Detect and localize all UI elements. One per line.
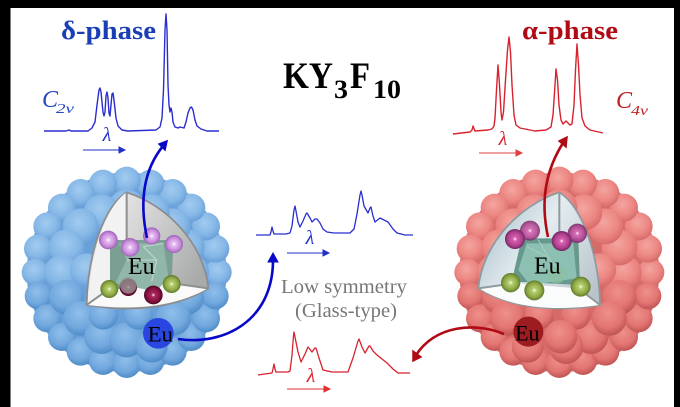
symmetry label: C4v: 4v <box>631 104 649 119</box>
blue spheres <box>22 167 232 378</box>
arrow: blue core to delta spectrum <box>143 141 167 238</box>
symmetry label: C4v <box>616 88 649 119</box>
symmetry label: C2v <box>42 87 75 117</box>
spectrum: low symmetry blue <box>256 191 413 256</box>
spectrum: low symmetry red <box>258 332 410 392</box>
Eu label: Eu <box>534 253 561 279</box>
red spheres <box>454 167 664 378</box>
heading: alpha phase: α-phase <box>522 16 618 45</box>
wavelength arrow <box>479 150 522 156</box>
wavelength symbol: λ <box>498 128 508 150</box>
title: 3 <box>334 75 348 104</box>
nanoparticle: blue delta phase <box>22 167 232 378</box>
title: 10 <box>373 75 401 104</box>
cutaway wedge <box>87 192 208 308</box>
title: F <box>350 56 370 97</box>
wavelength symbol: λ <box>306 365 316 387</box>
arrow: red core to alpha spectrum <box>544 137 567 237</box>
highlighted Eu site: Eu <box>148 322 173 347</box>
spectrum: alpha phase <box>453 37 603 156</box>
nanoparticle: red alpha phase <box>454 167 664 378</box>
coordination polyhedron <box>110 240 173 292</box>
title <box>283 56 401 104</box>
spectrum: delta phase <box>44 14 219 153</box>
title: KY <box>283 56 333 97</box>
text: low symmetry <box>281 276 407 322</box>
coordination polyhedron <box>512 238 580 285</box>
text: low symmetry: Low symmetry <box>281 276 407 298</box>
arrow: blue Eu to low symmetry spectrum <box>178 253 278 340</box>
cutaway wedge <box>478 192 600 308</box>
wavelength symbol: λ <box>102 124 112 146</box>
fluorine ions <box>99 227 183 304</box>
highlighted Eu site: Eu <box>515 321 540 346</box>
wavelength arrow <box>287 250 329 256</box>
text: low symmetry: (Glass-type) <box>295 300 397 322</box>
arrow: red Eu to low symmetry spectrum <box>413 327 504 361</box>
Eu label: Eu <box>128 254 155 280</box>
wavelength arrow <box>83 147 125 153</box>
symmetry label: C2v: 2v <box>56 102 75 117</box>
highlighted Eu site <box>513 317 577 353</box>
heading: delta phase: δ-phase <box>61 16 156 45</box>
highlighted Eu site <box>143 318 174 349</box>
fluorine ions <box>501 221 591 300</box>
symmetry label: C2v: C <box>42 87 59 113</box>
wavelength symbol: λ <box>305 227 315 249</box>
symmetry label: C4v: C <box>616 88 633 114</box>
wavelength arrow <box>287 386 330 392</box>
